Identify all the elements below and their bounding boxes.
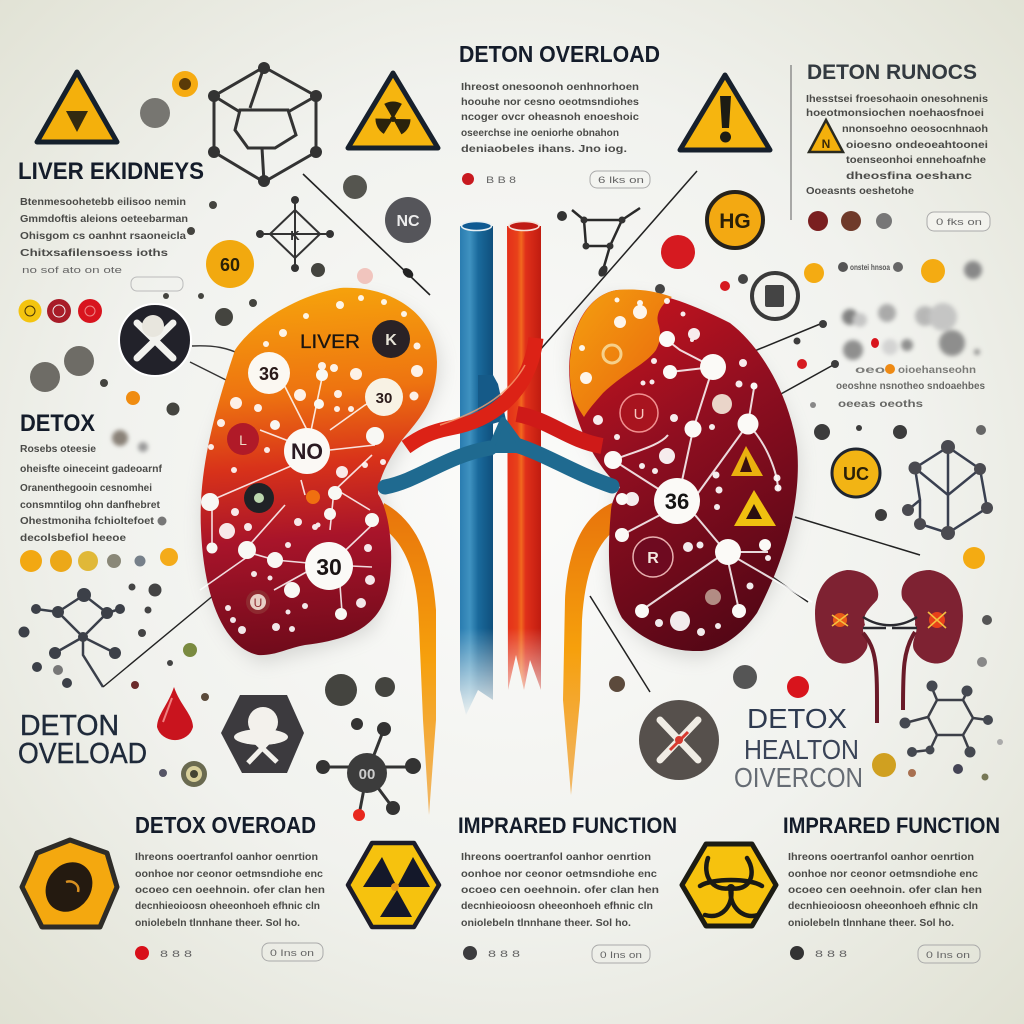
icon: star molecule [18,588,125,688]
left kidney network [200,373,382,612]
orange dot [963,547,985,569]
icon: small molecule center [557,208,640,278]
heading: liver kidneys: LIVER EKIDNEYS [18,158,204,185]
footer [462,171,650,188]
footer: B B 8 [486,175,516,185]
text block: detox: decolsbefiol heeoe [20,532,126,544]
text block: oniolebeln tlnnhane theer. Sol ho. [461,917,631,929]
icon: small ring [159,761,207,787]
text block: Ihreons ooertranfol oanhor oenrtion [461,851,651,863]
pointer line to left kidney [303,174,430,295]
text block: nnonsoehno oeosocnhnaoh [842,123,988,135]
small dots [128,584,197,689]
text block: right middle: oeo [855,364,885,376]
text block: Ooeasnts oeshetohe [806,185,914,197]
text block [461,81,639,155]
text block: detox [20,443,162,544]
badge: NC [385,197,431,243]
text block: oonhoe nor ceonor oetmsndiohe enc [461,868,657,880]
footer [463,945,650,963]
text block: liver kidneys: no sof ato on ote [22,265,122,275]
red balls and dots [357,235,982,369]
badge: K [372,320,410,358]
icon: hexagon molecule right [902,440,993,540]
text block: detox: Ohestmoniha fchioltefoet [20,515,155,527]
icon: hexagon hazard [221,695,304,773]
heading: deton overload left: DETON [20,710,119,742]
heading: detox healton overcon: OIVERCON [734,762,863,793]
text block: detox: oheisfte oineceint gadeoarnf [20,463,162,475]
ureter left [378,503,436,815]
right kidney network [613,340,812,610]
badge: HG [707,192,763,248]
text block [461,851,659,929]
dots lower center [609,665,809,698]
icon: orange dot [172,71,198,97]
panel: liver and kidneys top-left [18,158,204,291]
vertical blue vessel [460,226,493,715]
text block: Ihreons ooertranfol oanhor oenrtion [788,851,974,863]
footer [135,943,323,961]
text block: decnhieoioosn oheeonhoeh efhnic cln [461,900,653,912]
heading: IMPRARED FUNCTION [783,813,1000,838]
text block: dheosfina oeshanc [846,170,972,182]
icon: X badge [639,700,719,780]
badge: dark O [244,483,274,513]
heading: IMPRARED FUNCTION [458,813,677,838]
footer [790,945,980,963]
branch blue [385,420,612,487]
badge: 36 right: 36 [665,489,689,514]
heading: DETON RUNOCS [807,61,977,84]
icon: small molecule: K [290,228,300,243]
text block: oonhoe nor ceonor oetmsndiohe enc [788,868,978,880]
icon: UC badge [832,449,880,497]
branch red right [517,414,602,446]
badge: NC: NC [396,213,420,230]
icon: small molecule [256,196,334,272]
icon: UC badge: UC [843,464,869,484]
left kidney nodes [201,369,384,620]
text snippet: onstei hnsoa [850,263,890,272]
text block: oioesno ondeoeahtoonei [846,139,988,151]
scattered dots [100,201,325,416]
badge: NO: NO [291,439,323,464]
icon: orange lobe ring [603,345,621,363]
vertical red vessel [507,226,541,690]
text block: oniolebeln tlnnhane theer. Sol ho. [788,917,954,929]
heading: DETOX OVEROAD [135,812,316,838]
badge: red L [227,423,259,455]
text block: liver kidneys [20,196,188,275]
footer: 8 8 8 [160,949,192,959]
badge: 30 top: 30 [376,390,392,407]
icon: fuel can badge [752,273,798,319]
panel: impaired function center [348,813,677,963]
badge: 36 [248,352,290,394]
heading: detox healton overcon: HEALTON [744,734,859,765]
icon: small warning triangle [731,446,763,476]
balls [30,346,94,392]
footer: 6 lks on [598,175,644,185]
footer: 0 Ins on [600,950,642,960]
vessels faded bottom [460,226,541,715]
badge: HG: HG [719,210,751,233]
small dots beside kidneys [977,615,992,667]
text block: Ihesstsei froesohaoin onesohnenis [806,93,988,105]
text block: ocoeo cen oeehnoin. ofer clan hen [461,884,659,896]
balls bottom right [872,739,1003,780]
heading: detox healton overcon [734,703,863,793]
orange dot left [126,391,140,405]
text block: oniolebeln tlnnhane theer. Sol ho. [135,917,300,929]
icon: blood drop [157,687,193,740]
icon: star molecule bottom: 00 [359,766,375,783]
footer: 0 Ins on [926,950,970,960]
dot row: left icons [18,299,102,323]
text block: ncoger ovcr oheasnoh enoeshoic [461,111,639,123]
left kidney orange spot [306,490,320,504]
vessels and kidneys illustration [200,222,812,815]
small dots right [794,320,986,521]
icon: small warning triangle: N [822,137,830,151]
balls [325,674,395,706]
right kidney speckles [579,298,782,636]
right kidney [569,290,798,651]
icon: warning triangle with hazard mark [37,72,117,142]
panel: impaired function right [682,813,1000,963]
heading: deton overload left [18,710,147,770]
right kidney nodes [604,331,771,618]
badge: 60: 60 [220,255,240,275]
text block: liver kidneys: Gmmdoftis aleions oeteebarman [20,213,188,225]
small grey dot [158,516,166,526]
text block: right middle: oeoshne nsnotheo sndoaehbes [836,380,985,392]
footer [808,211,990,231]
pointer dot [401,266,415,280]
icon: small warning triangle [809,120,843,152]
text block: hoeotmonsiochen noehaosfnoei [806,107,984,119]
badge: 30 bottom [305,542,353,590]
text block [806,93,988,197]
text block: right middle [836,364,985,410]
kidney shadows [202,298,799,663]
blurred grey mark [112,430,148,452]
heading: detox: DETOX [20,410,95,437]
text block: deniaobeles ihans. Jno iog. [461,143,627,155]
badge: K: K [385,332,397,349]
left kidney speckles [208,295,423,634]
badge: 36: 36 [259,364,279,384]
heading: deton overload left: OVELOAD [18,738,147,770]
footer: 8 8 8 [488,949,520,959]
footer: 0 Ins on [270,948,314,958]
text block: detox: Oranenthegooin cesnomhei [20,482,152,494]
icon: R ring badge [633,537,673,577]
vessel openings [462,222,539,230]
faint mark [705,589,721,605]
blurred molecule cluster [842,303,980,360]
text block: detox: consmntilog ohn danfhebret [20,499,160,511]
badge: red L: L [239,432,247,448]
text block [135,851,325,929]
icon: R ring badge: R [647,550,659,567]
label: liver: LIVER [300,332,360,353]
icon: star molecule bottom [316,718,421,821]
icon: red ring badge: U [634,406,644,423]
icon: large warning triangle [734,490,776,526]
text block: right middle: oioehanseohn [898,364,976,376]
icon: grey ball [140,98,170,128]
badge: 36 right [654,478,700,524]
heading: detox healton overcon: DETOX [747,703,847,734]
dots row [20,548,178,572]
badge: 60 [206,240,254,288]
badge: faint U [246,590,270,614]
text snippet [838,262,903,272]
text block: Ihreons ooertranfol oanhor oenrtion [135,851,318,863]
text block: toenseonhoi ennehoafnhe [846,154,986,166]
text block: ocoeo cen oeehnoin. ofer clan hen [788,884,982,896]
text block: hoouhe nor cesno oeotmsndiohes [461,96,639,108]
label pill [131,277,183,291]
text block: decnhieoioosn oheeonhoeh efhnic cln [135,900,320,912]
text block: Ihreost onesoonoh oenhnorhoen [461,81,639,93]
badge: 30 bottom: 30 [316,554,342,580]
icon: hexagon biohazard [682,844,776,926]
pointer line to right kidney [540,171,697,350]
blue vessel flare [478,375,506,428]
panel: detox overload top center [459,41,660,188]
text block: detox: Rosebs oteesie [20,443,96,455]
left kidney [201,288,437,655]
small ring top [201,693,209,701]
pointer line to left kidney bottom [103,580,232,687]
panel: detox overload bottom-left [22,812,325,961]
swoosh highlight [440,365,525,425]
icon: radiation triangle [348,73,438,148]
pointer lines [190,346,242,380]
icon: molecule top-left [208,62,322,187]
text block: oonhoe nor ceonor oetmsndiohe enc [135,868,323,880]
text block: right middle: oeeas oeoths [838,398,923,410]
pointer lines right kidney [590,322,920,692]
badge: NO [284,428,330,474]
icon: skull and crossbones badge [119,304,191,376]
branch red swoosh [406,338,536,447]
icon: hexagon radiation [348,843,439,927]
small kidneys illustration [815,570,963,723]
text block: liver kidneys: Chitxsafilensoess ioths [20,247,168,259]
icon: red ring badge [620,394,658,432]
panel: detox left [20,410,178,572]
text block: decnhieoioosn oheeonhoeh efhnic cln [788,900,978,912]
icon: hexagon molecule bottom right [900,680,993,758]
text block: oseerchse ine oeniorhe obnahon [461,127,619,139]
footer: 8 8 8 [815,949,847,959]
badge: 30 top [365,378,403,416]
divider [790,65,792,220]
text block: ocoeo cen oeehnoin. ofer clan hen [135,884,325,896]
heading: DETON OVERLOAD [459,41,660,67]
footer: 0 fks on [936,217,982,227]
icon: warning triangle right [680,75,770,150]
ureter right [563,503,615,795]
panel: deton runocs top right [791,61,990,231]
text block: liver kidneys: Ohisgom cs oanhnt rsaoneicla [20,230,186,242]
dot [343,175,367,199]
text block: liver kidneys: Btenmesoohetebb eilisoo nemin [20,196,186,208]
text block [788,851,982,929]
red dot cluster [871,338,879,348]
right kidney orange lobe [570,289,672,417]
icon: hexagon kidney [22,840,117,927]
badge: faint U: U [254,596,262,610]
